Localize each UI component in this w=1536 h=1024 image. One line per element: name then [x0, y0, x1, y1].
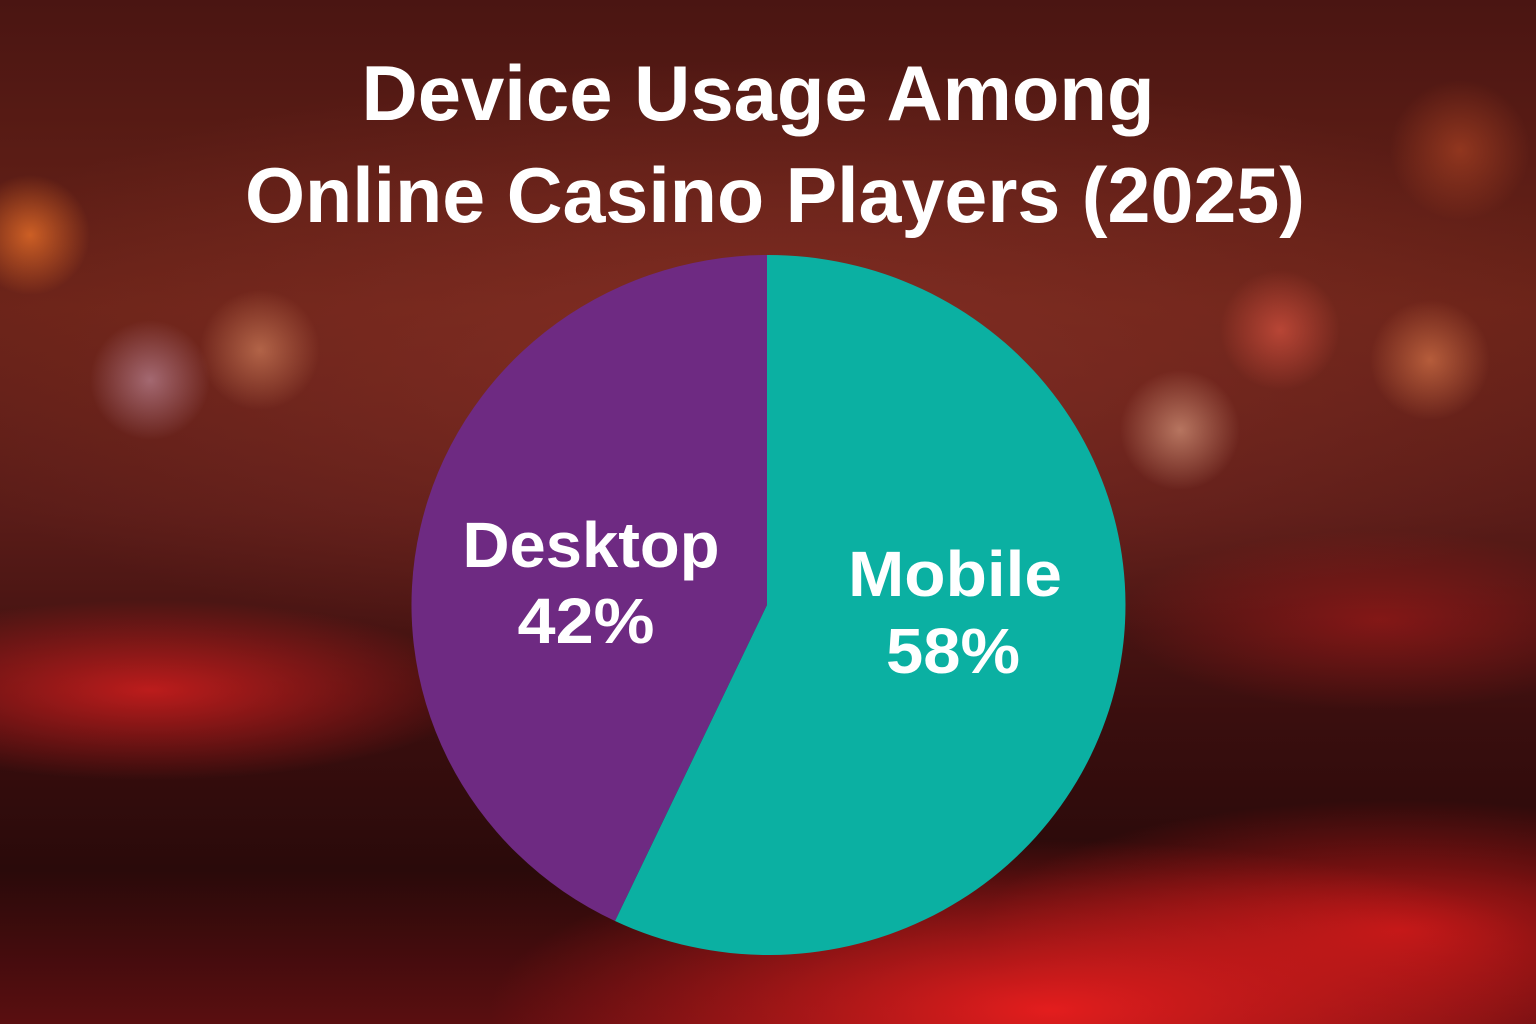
label: mobile	[848, 538, 1062, 687]
slice: mobile 58%	[615, 255, 1125, 955]
title	[245, 49, 1305, 239]
label: mobile: Mobile	[848, 538, 1062, 610]
label: mobile: 58%	[886, 615, 1020, 687]
label: desktop: Desktop	[462, 509, 720, 581]
pie chart	[411, 255, 1125, 955]
label: desktop: 42%	[518, 585, 654, 657]
label: desktop	[462, 509, 720, 657]
slice: desktop 42%	[411, 255, 767, 921]
title: Online Casino Players (2025)	[245, 151, 1305, 239]
title: Device Usage Among	[362, 49, 1154, 137]
